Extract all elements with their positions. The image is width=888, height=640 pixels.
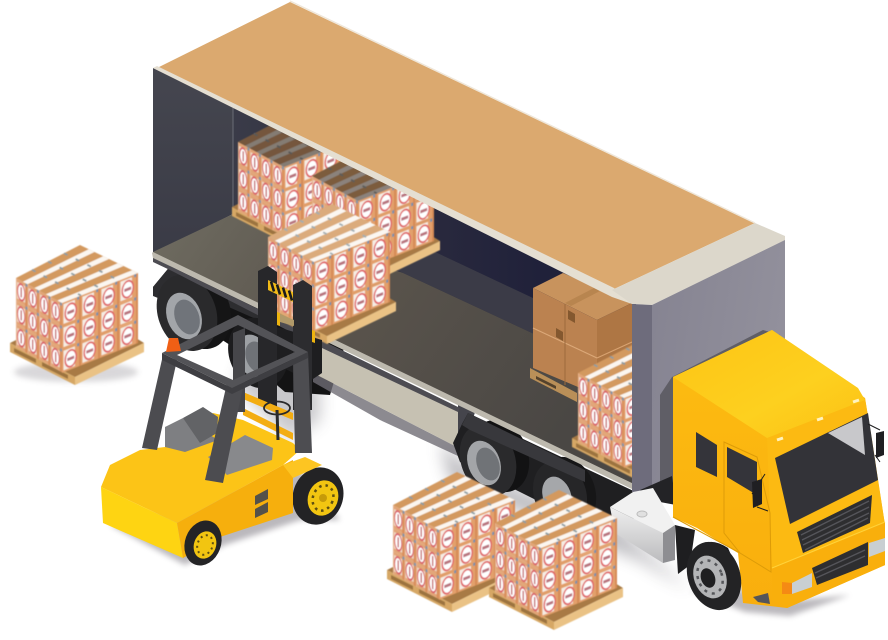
steering wheel: [264, 402, 290, 440]
cab shadow on wall: [660, 330, 780, 500]
windshield: [775, 413, 878, 524]
pallet: lifted on forklift: [262, 204, 396, 344]
orange beacon: [166, 338, 181, 352]
roof edge: [153, 66, 632, 304]
mid chassis beam: [453, 413, 640, 530]
second rear wheel: [218, 309, 298, 397]
body rear face: [101, 487, 183, 558]
cab wheel: [678, 534, 750, 618]
floor: [153, 214, 636, 490]
roof front band: [612, 223, 785, 305]
right wheel: [285, 460, 351, 532]
ground shadows: [14, 345, 850, 616]
cab roof: [673, 330, 865, 438]
door outline: [673, 442, 771, 572]
pallet: middle of trailer: [306, 143, 440, 283]
body side: [177, 460, 293, 558]
left wheel: [178, 515, 228, 571]
trailer interior: [152, 68, 636, 491]
bumper: [772, 522, 885, 608]
rear wheel arch: [153, 264, 345, 395]
door window: [727, 447, 757, 495]
rear inner panel: [153, 68, 233, 255]
cab body: [673, 330, 885, 608]
cardboard boxes on pallet: [530, 273, 632, 402]
front wall: [652, 240, 785, 500]
rear wheel: [146, 264, 242, 360]
middle wheel 1: [450, 412, 539, 504]
headlight right: [869, 538, 885, 557]
front wall corner post: [632, 304, 652, 492]
truck cab: [673, 330, 885, 608]
interior side wall: [233, 107, 636, 400]
middle wheel 2: [524, 449, 606, 535]
trailer chassis and rear wheels: [146, 264, 640, 535]
body top: [101, 413, 300, 523]
headlight left: [792, 573, 812, 594]
counterweight bars: [243, 392, 293, 440]
side step: [283, 457, 322, 478]
pallet: right of trailer, clipped by the wall: [572, 340, 706, 480]
pallet: standing left: [10, 245, 144, 385]
upper grille: [797, 495, 872, 553]
trailer roof and front wall: [153, 1, 785, 505]
pallet: front right: [489, 490, 623, 630]
mast: [258, 266, 322, 410]
forklift: [101, 266, 351, 571]
safety cage: [142, 315, 312, 483]
pallet: front left: [387, 472, 521, 612]
windshield reflection: [828, 417, 865, 455]
silver fuel tank: [610, 488, 695, 574]
cab step: [753, 593, 770, 604]
left mirror: [752, 474, 768, 511]
roof lights: [777, 400, 859, 440]
cab front face: [767, 398, 885, 608]
dash: [208, 435, 273, 475]
roof: [157, 2, 755, 290]
side panel: [313, 345, 475, 456]
turn signal: [782, 582, 792, 594]
lower grille: [812, 542, 868, 585]
pallet: back of trailer: [232, 109, 366, 249]
right mirror: [868, 424, 884, 462]
floor edge: [152, 252, 636, 491]
vents: [255, 489, 268, 518]
seat: [165, 407, 218, 452]
rear side window: [696, 432, 717, 477]
hazard strip: [268, 280, 293, 302]
gap above fuel tank: [640, 476, 676, 505]
